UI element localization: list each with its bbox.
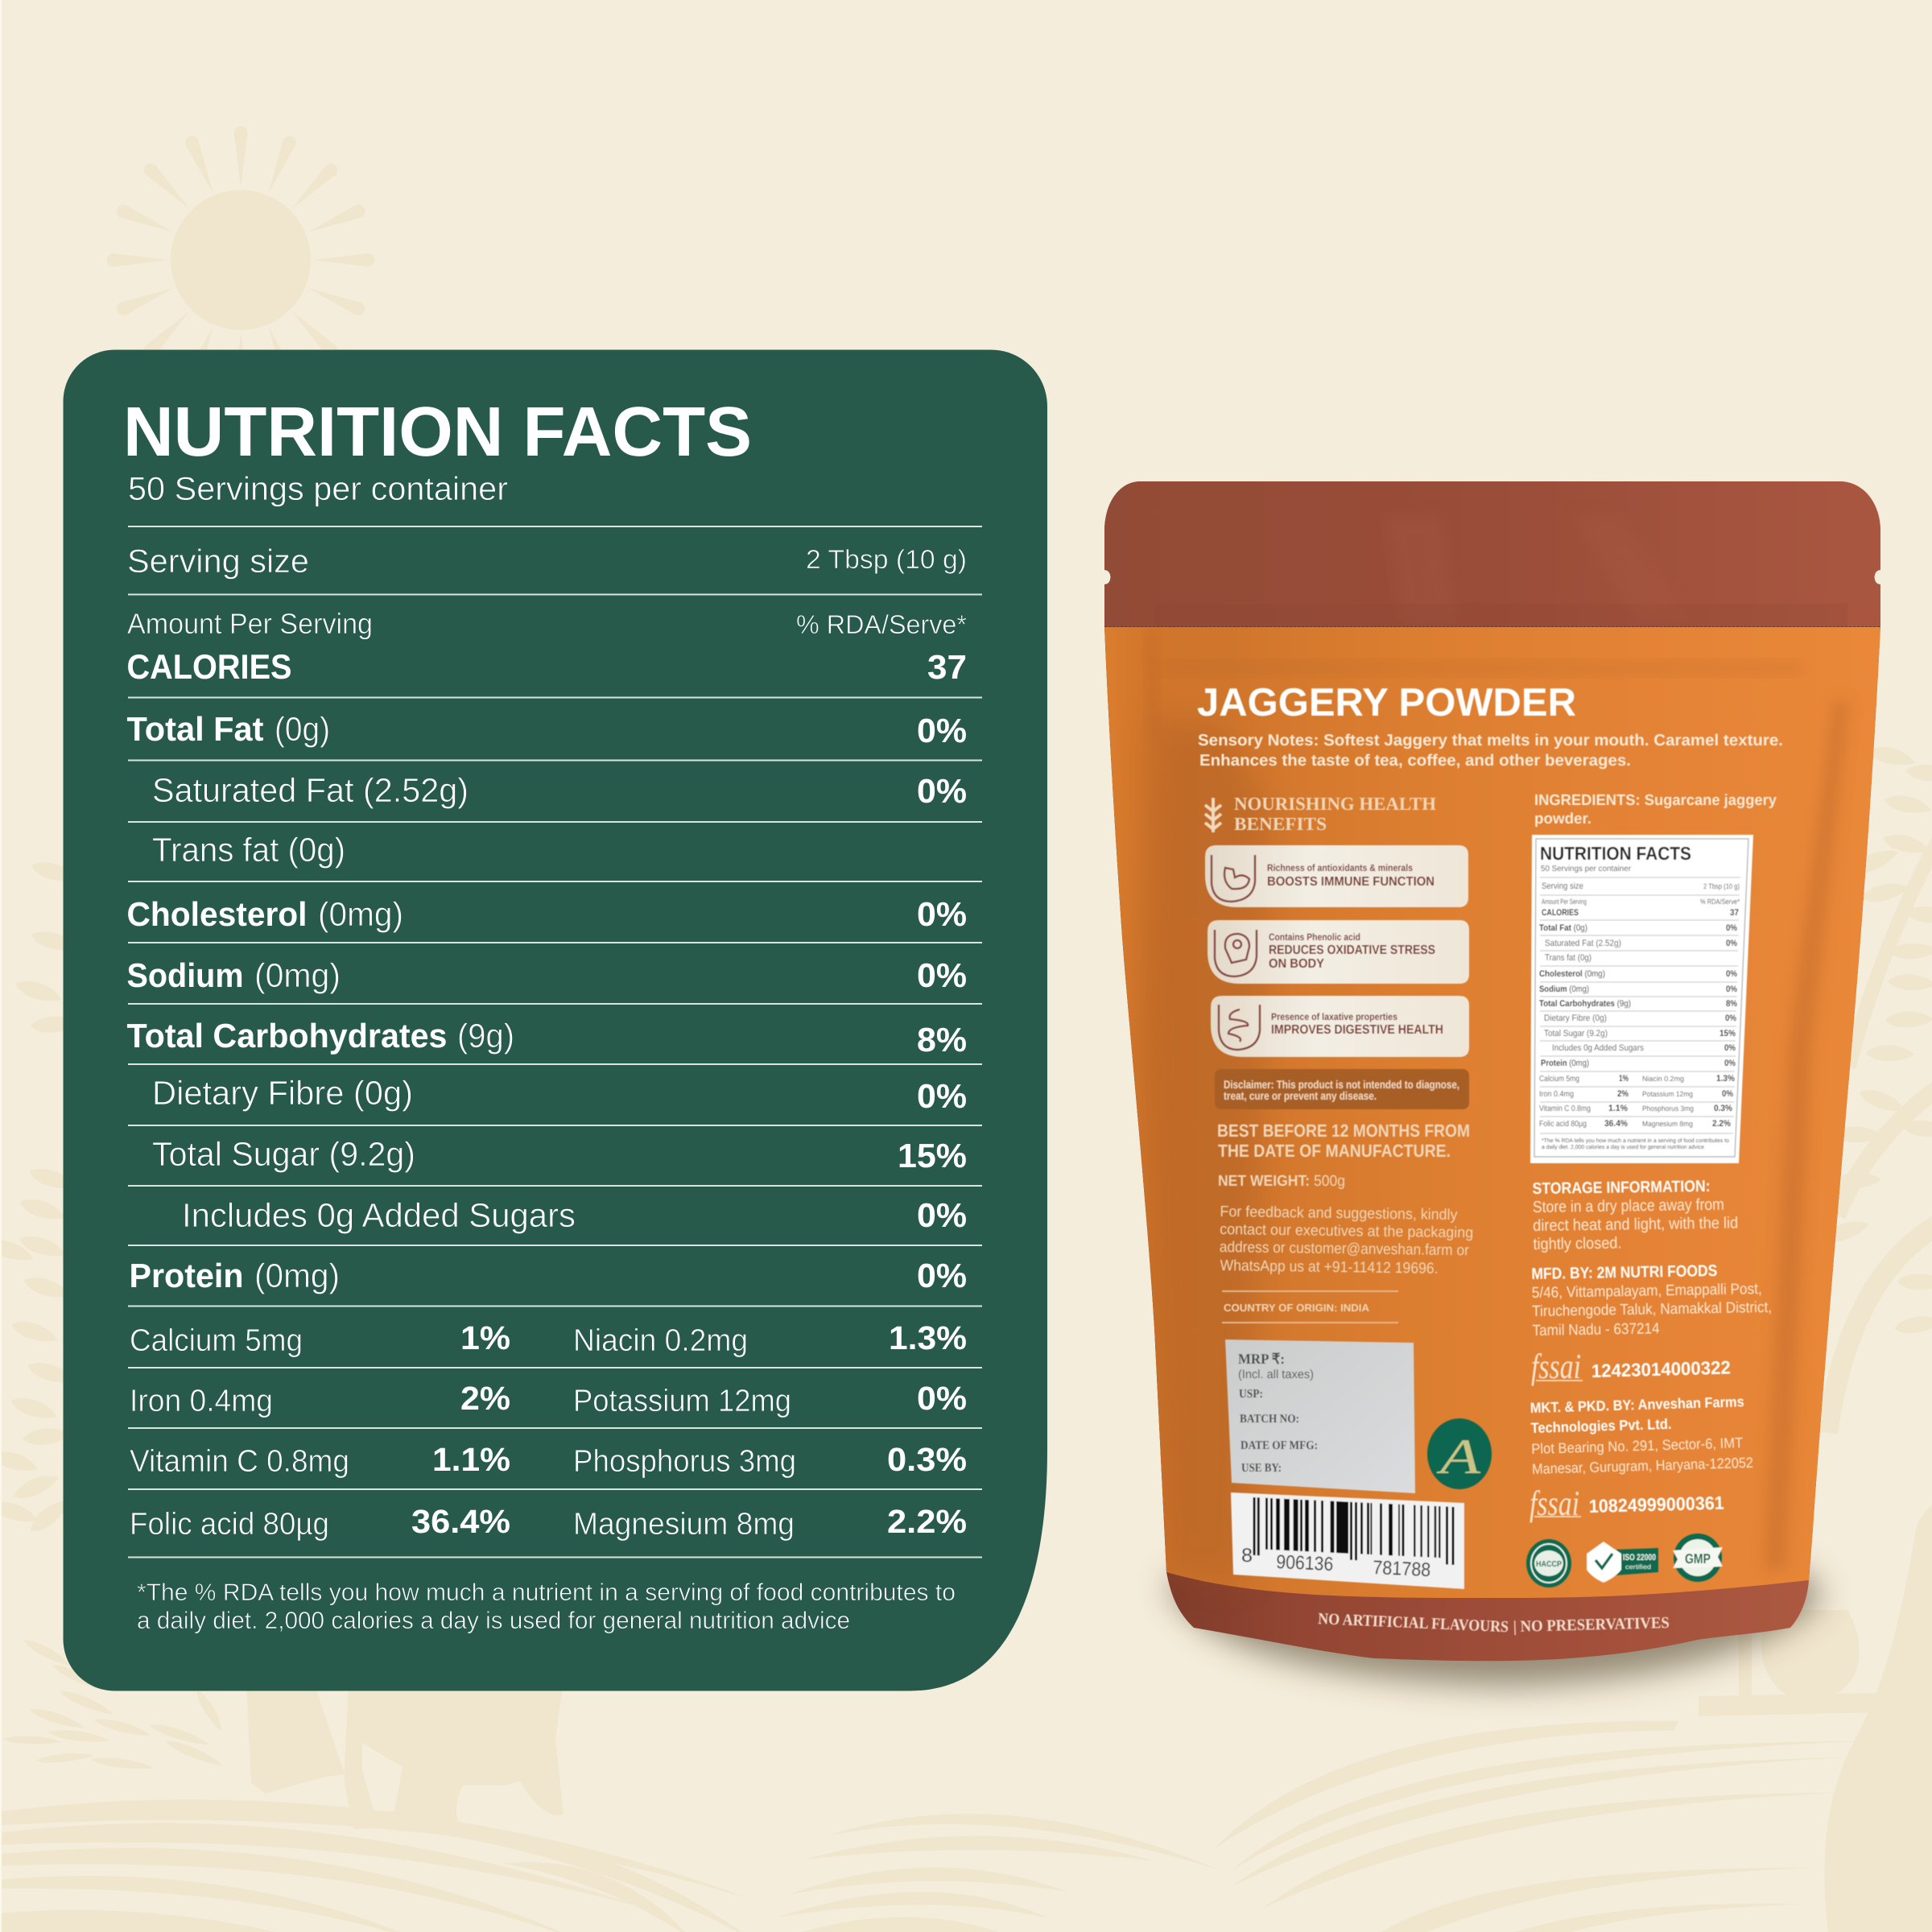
- manufacturer: MFD. BY: 2M NUTRI FOODS: [1531, 1262, 1718, 1283]
- row: serving size: 2 Tbsp (10 g): [806, 544, 967, 574]
- badge: iso: [1587, 1542, 1658, 1583]
- brand logo: [1427, 1418, 1492, 1489]
- row: iron and potassium: 2%: [460, 1380, 510, 1417]
- row: added sugars: Includes 0g Added Sugars: [182, 1196, 576, 1234]
- brand logo: A: [1436, 1430, 1481, 1484]
- small nutrition label: Trans fat (0g): [1545, 953, 1591, 963]
- small nutrition label: 0%: [1725, 1013, 1736, 1023]
- icon: head: [1215, 930, 1257, 976]
- benefit card 2: [1208, 920, 1469, 984]
- row: total fat: [127, 710, 967, 749]
- fssai licence 1: 12423014000322: [1591, 1356, 1731, 1381]
- small nutrition label: a daily diet. 2,000 calories a day is used for general nutrition advice: [1542, 1144, 1704, 1150]
- mrp box: (Incl. all taxes): [1238, 1368, 1314, 1381]
- small nutrition label: 2.2%: [1712, 1119, 1731, 1129]
- pouch orange body: [1104, 627, 1880, 1598]
- disclaimer box: treat, cure or prevent any disease.: [1224, 1089, 1377, 1102]
- storage information: STORAGE INFORMATION:: [1532, 1178, 1711, 1198]
- row: folic acid and magnesium: 36.4%: [411, 1503, 510, 1540]
- row: added sugars: [182, 1196, 967, 1234]
- marketer: Technologies Pvt. Ltd.: [1530, 1416, 1672, 1436]
- row: sodium: (0mg): [254, 956, 341, 994]
- row: protein: (0mg): [254, 1257, 340, 1294]
- benefits heading: [1234, 794, 1436, 834]
- row: folic acid and magnesium: Folic acid 80µg: [130, 1507, 329, 1542]
- right tree leaves: [1820, 745, 1932, 1339]
- small nutrition label: 2 Tbsp (10 g): [1703, 882, 1740, 890]
- row: calories: 37: [927, 648, 967, 686]
- manufacturer: [1531, 1261, 1773, 1340]
- small nutrition label: 0.3%: [1714, 1104, 1732, 1113]
- small nutrition label: % RDA/Serve*: [1700, 898, 1740, 906]
- cow silhouette: [344, 1682, 564, 1829]
- small nutrition label: 0%: [1726, 939, 1737, 948]
- row: sodium: [127, 956, 967, 994]
- country of origin: COUNTRY OF ORIGIN: INDIA: [1224, 1302, 1370, 1314]
- row: iron and potassium: 0%: [917, 1380, 967, 1417]
- row: trans fat: Trans fat (0g): [152, 831, 345, 869]
- row: vitamin c and phosphorus: Phosphorus 3mg: [573, 1444, 796, 1479]
- row: total fat: (0g): [275, 710, 330, 748]
- footnote: [137, 1579, 956, 1634]
- small nutrition label: 0%: [1724, 1043, 1736, 1053]
- fssai licence 1: fssai: [1531, 1347, 1581, 1386]
- row: protein: Protein: [129, 1257, 243, 1294]
- footnote: *The % RDA tells you how much a nutrient in a serving of food contributes to: [137, 1579, 956, 1606]
- small nutrition label: 1.3%: [1716, 1074, 1735, 1084]
- small nutrition label: 0%: [1726, 923, 1737, 933]
- row: dietary fibre: [152, 1074, 967, 1115]
- small nutrition label: 2%: [1617, 1089, 1629, 1099]
- feedback text: For feedback and suggestions, kindly: [1220, 1203, 1458, 1224]
- small nutrition label: 15%: [1719, 1029, 1736, 1038]
- right tree trunk: [1824, 1497, 1932, 1932]
- feedback text: WhatsApp us at +91-11412 19696.: [1220, 1257, 1439, 1278]
- fssai licence 2: fssai: [1530, 1484, 1579, 1523]
- small nutrition label: Total Sugar (9.2g): [1544, 1029, 1608, 1038]
- row: sodium: Sodium: [127, 956, 243, 994]
- mrp box: MRP ₹:: [1238, 1351, 1285, 1367]
- row: sodium: 0%: [917, 956, 967, 994]
- benefits heading: BENEFITS: [1234, 814, 1327, 834]
- servings per container: 50 Servings per container: [128, 470, 508, 507]
- disclaimer box: Disclaimer: This product is not intended to diagnose,: [1224, 1078, 1459, 1091]
- row: calcium and niacin: [130, 1319, 967, 1358]
- ingredients: [1534, 792, 1777, 828]
- small nutrition label: 36.4%: [1604, 1119, 1628, 1129]
- row: cholesterol: [127, 895, 967, 933]
- row: folic acid and magnesium: [130, 1503, 967, 1542]
- row: amount per serving: [127, 607, 967, 640]
- mrp box: USP:: [1239, 1388, 1263, 1401]
- sensory notes: Sensory Notes: Softest Jaggery that melts in your mouth. Caramel texture.: [1198, 732, 1783, 749]
- small nutrition label: Vitamin C 0.8mg: [1539, 1104, 1591, 1113]
- left tree leaves: [0, 860, 80, 1538]
- table rules: [128, 526, 982, 1557]
- small nutrition label: 0%: [1722, 1089, 1733, 1099]
- small nutrition label: Dietary Fibre (0g): [1544, 1013, 1607, 1023]
- benefit card 2: ON BODY: [1269, 957, 1324, 971]
- small nutrition label: 0%: [1726, 969, 1737, 979]
- badge: iso: ISO 22000: [1623, 1553, 1656, 1563]
- barcode: [1231, 1492, 1464, 1589]
- benefit card 1: [1205, 845, 1468, 907]
- product pouch: [1095, 475, 1892, 1661]
- benefit card 3: Presence of laxative properties: [1271, 1011, 1397, 1022]
- row: serving size: [127, 543, 967, 580]
- bottom claim: | NO PRESERVATIVES: [1513, 1614, 1670, 1636]
- row: folic acid and magnesium: 2.2%: [887, 1503, 967, 1540]
- benefit card 2: Contains Phenolic acid: [1269, 931, 1360, 943]
- row: total carbohydrates: [127, 1017, 967, 1059]
- badge: iso: certified: [1625, 1563, 1651, 1571]
- row: total carbohydrates: 8%: [917, 1021, 967, 1059]
- small nutrition label: Sodium (0mg): [1539, 985, 1589, 994]
- row: dietary fibre: 0%: [917, 1077, 967, 1115]
- row: protein: 0%: [917, 1257, 967, 1294]
- row: total carbohydrates: Total Carbohydrates: [127, 1017, 448, 1055]
- feedback text: address or customer@anveshan.farm or: [1220, 1239, 1470, 1259]
- row: total sugar: 15%: [898, 1137, 967, 1174]
- row: total sugar: Total Sugar (9.2g): [152, 1135, 415, 1173]
- row: cholesterol: (0mg): [318, 895, 403, 933]
- small nutrition label: Cholesterol (0mg): [1539, 969, 1605, 979]
- icon: wheat: [1205, 798, 1221, 832]
- row: serving size: Serving size: [127, 543, 309, 580]
- barcode: 906136: [1276, 1551, 1334, 1575]
- reeds right: [1214, 1721, 1861, 1932]
- row: total carbohydrates: (9g): [457, 1017, 514, 1055]
- badge: haccp: [1526, 1539, 1571, 1587]
- row: total fat: 0%: [917, 712, 967, 749]
- small nutrition label: 0%: [1726, 985, 1737, 994]
- barcode: 8: [1241, 1545, 1253, 1567]
- marketer: Manesar, Gurugram, Haryana-122052: [1532, 1455, 1753, 1477]
- storage information: Store in a dry place away from: [1533, 1196, 1724, 1216]
- row: added sugars: 0%: [917, 1196, 967, 1234]
- small nutrition label: Potassium 12mg: [1642, 1090, 1693, 1098]
- icon: muscle: [1212, 855, 1255, 902]
- sensory notes: Enhances the taste of tea, coffee, and other beverages.: [1199, 752, 1631, 770]
- small nutrition label: [1530, 835, 1753, 1163]
- country of origin: [1222, 1291, 1398, 1323]
- row: amount per serving: % RDA/Serve*: [796, 609, 967, 639]
- reeds left: [0, 1800, 753, 1932]
- benefit card 3: [1211, 996, 1469, 1057]
- small nutrition label: Protein (0mg): [1541, 1059, 1589, 1068]
- small nutrition label: Total Fat (0g): [1539, 923, 1587, 933]
- wheat plant under panel: [3, 1637, 228, 1770]
- small nutrition label: 8%: [1726, 999, 1737, 1009]
- row: iron and potassium: Potassium 12mg: [573, 1384, 791, 1418]
- sensory notes: [1198, 732, 1783, 770]
- benefits heading: NOURISHING HEALTH: [1234, 794, 1436, 814]
- small nutrition label: 1.1%: [1608, 1104, 1628, 1113]
- ingredients: powder.: [1534, 811, 1591, 828]
- pot on plank: [1699, 1610, 1885, 1716]
- small nutrition label: *The % RDA tells you how much a nutrient in a serving of food contributes to: [1542, 1137, 1729, 1144]
- row: saturated fat: 0%: [917, 772, 967, 810]
- row: vitamin c and phosphorus: 0.3%: [887, 1441, 967, 1478]
- small nutrition label: 50 Servings per container: [1541, 865, 1632, 873]
- small nutrition label: Niacin 0.2mg: [1642, 1075, 1684, 1083]
- pouch title: JAGGERY POWDER: [1197, 681, 1576, 724]
- barcode: 781788: [1373, 1557, 1431, 1581]
- row: amount per serving: Amount Per Serving: [127, 607, 373, 640]
- pouch shadow: [1167, 1570, 1823, 1686]
- badge: haccp: HACCP: [1536, 1560, 1562, 1569]
- small nutrition label: Total Carbohydrates (9g): [1539, 999, 1631, 1009]
- title: NUTRITION FACTS: [123, 393, 752, 471]
- row: total sugar: [152, 1135, 967, 1174]
- ingredients: INGREDIENTS: Sugarcane jaggery: [1534, 792, 1777, 809]
- feedback text: [1219, 1203, 1474, 1278]
- row: calcium and niacin: Calcium 5mg: [130, 1323, 303, 1358]
- mrp box: USE BY:: [1241, 1462, 1282, 1475]
- icon: sun: [107, 126, 374, 394]
- storage information: direct heat and light, with the lid: [1533, 1214, 1738, 1235]
- marketer: [1530, 1393, 1753, 1477]
- row: calcium and niacin: Niacin 0.2mg: [573, 1323, 748, 1358]
- row: calories: CALORIES: [127, 648, 291, 687]
- row: folic acid and magnesium: Magnesium 8mg: [573, 1507, 795, 1542]
- row: cholesterol: Cholesterol: [127, 895, 308, 933]
- fssai licence 1: [1531, 1347, 1731, 1386]
- small nutrition label: 37: [1730, 908, 1739, 918]
- benefit card 1: Richness of antioxidants & minerals: [1267, 862, 1413, 873]
- best before: [1217, 1121, 1470, 1161]
- small nutrition label: Phosphorus 3mg: [1642, 1104, 1694, 1113]
- badge: gmp: [1673, 1534, 1723, 1582]
- row: saturated fat: Saturated Fat (2.52g): [152, 771, 469, 809]
- right tree branches: [1827, 837, 1932, 1433]
- net weight: NET WEIGHT: 500g: [1218, 1173, 1345, 1190]
- disclaimer box: [1215, 1069, 1469, 1109]
- small nutrition label: Calcium 5mg: [1539, 1075, 1579, 1084]
- mrp box: BATCH NO:: [1240, 1413, 1299, 1426]
- marketer: MKT. & PKD. BY: Anveshan Farms: [1530, 1393, 1744, 1416]
- pouch base: [1104, 481, 1880, 1661]
- bottom claim: [1318, 1610, 1670, 1636]
- storage information: tightly closed.: [1533, 1234, 1622, 1253]
- row: vitamin c and phosphorus: 1.1%: [432, 1441, 510, 1478]
- feedback text: contact our executives at the packaging: [1220, 1221, 1473, 1241]
- best before: BEST BEFORE 12 MONTHS FROM: [1217, 1121, 1470, 1141]
- row: calcium and niacin: 1.3%: [889, 1319, 967, 1356]
- manufacturer: 5/46, Vittampalayam, Emappalli Post,: [1532, 1281, 1762, 1302]
- fssai licence 2: [1530, 1484, 1724, 1523]
- storage information: [1532, 1177, 1739, 1253]
- mrp box: DATE OF MFG:: [1241, 1439, 1318, 1452]
- row: calories: [127, 648, 967, 687]
- bottom claim: NO ARTIFICIAL FLAVOURS: [1318, 1610, 1509, 1636]
- small nutrition label: Magnesium 8mg: [1642, 1120, 1693, 1128]
- small nutrition label: Folic acid 80µg: [1539, 1120, 1587, 1129]
- row: iron and potassium: Iron 0.4mg: [130, 1384, 273, 1418]
- row: dietary fibre: Dietary Fibre (0g): [152, 1074, 413, 1112]
- manufacturer: Tamil Nadu - 637214: [1532, 1320, 1660, 1340]
- small nutrition label: 1%: [1619, 1074, 1629, 1084]
- small nutrition label: 0%: [1724, 1059, 1736, 1068]
- manufacturer: Tiruchengode Taluk, Namakkal District,: [1532, 1299, 1772, 1320]
- row: vitamin c and phosphorus: Vitamin C 0.8mg: [130, 1444, 349, 1479]
- benefit card 1: BOOSTS IMMUNE FUNCTION: [1267, 875, 1435, 889]
- reeds centre: [765, 1814, 1220, 1932]
- marketer: Plot Bearing No. 291, Sector-6, IMT: [1531, 1435, 1743, 1457]
- small nutrition label: Serving size: [1542, 881, 1583, 891]
- icon: intestine: [1219, 1005, 1260, 1050]
- tree trunk left: [246, 1682, 345, 1794]
- benefit card 2: REDUCES OXIDATIVE STRESS: [1269, 943, 1435, 957]
- small nutrition label: NUTRITION FACTS: [1540, 843, 1691, 864]
- small nutrition label: CALORIES: [1542, 908, 1579, 918]
- small nutrition label: Amount Per Serving: [1542, 898, 1587, 906]
- mrp box: [1225, 1340, 1415, 1493]
- row: saturated fat: [152, 771, 967, 810]
- small nutrition label: Includes 0g Added Sugars: [1552, 1043, 1644, 1053]
- badge: gmp: GMP: [1685, 1551, 1711, 1567]
- row: vitamin c and phosphorus: [130, 1441, 967, 1479]
- footnote: a daily diet. 2,000 calories a day is used for general nutrition advice: [137, 1608, 850, 1634]
- row: protein: [129, 1257, 967, 1294]
- row: calcium and niacin: 1%: [460, 1319, 510, 1356]
- panel background: [63, 349, 1047, 1690]
- row: total fat: Total Fat: [127, 710, 264, 748]
- row: iron and potassium: [130, 1380, 967, 1418]
- pouch top seal: [1095, 475, 1892, 627]
- benefit card 3: IMPROVES DIGESTIVE HEALTH: [1271, 1023, 1443, 1037]
- small nutrition label: Saturated Fat (2.52g): [1545, 939, 1621, 948]
- row: cholesterol: 0%: [917, 895, 967, 933]
- best before: THE DATE OF MANUFACTURE.: [1218, 1141, 1451, 1161]
- small nutrition label: Iron 0.4mg: [1539, 1090, 1574, 1099]
- fssai licence 2: 10824999000361: [1588, 1492, 1724, 1517]
- panel: nutrition facts: [63, 349, 1047, 1690]
